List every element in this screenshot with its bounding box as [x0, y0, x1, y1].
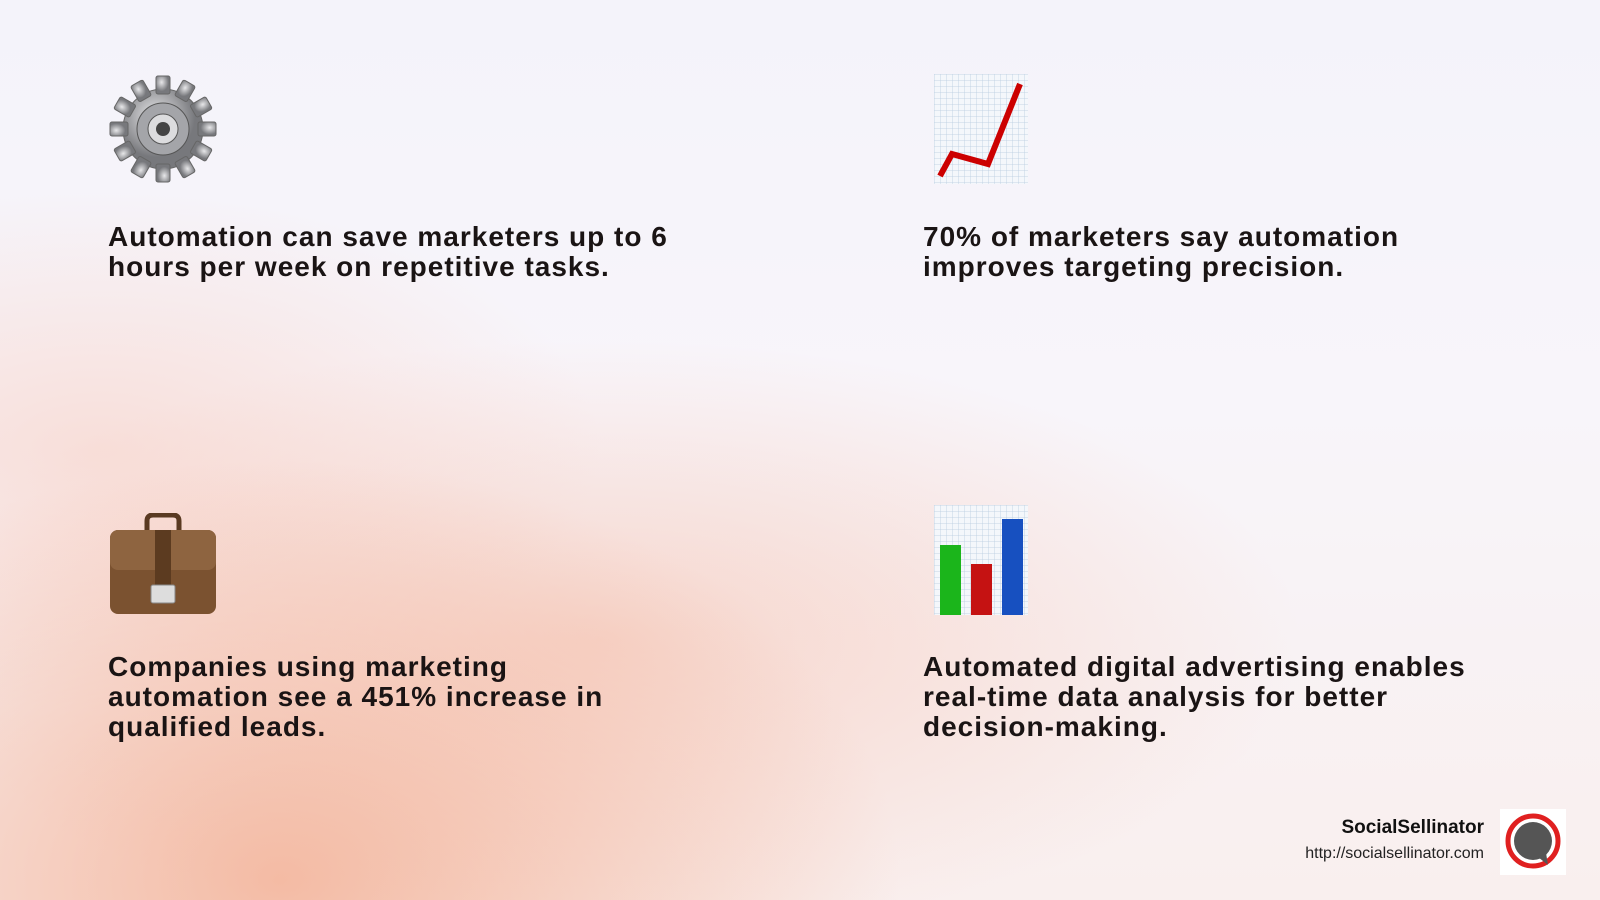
icon: logo — [1500, 809, 1566, 875]
text: stat 1 — [108, 221, 668, 282]
icon: briefcase — [110, 513, 216, 614]
text: stat 3: Companies using marketing — [108, 651, 508, 682]
text: stat 2: 70% of marketers say automation — [923, 221, 1399, 252]
text: stat 3 — [108, 651, 603, 742]
text: stat 1: Automation can save marketers up to 6 — [108, 221, 668, 252]
footer: brand: http://socialsellinator.com — [1305, 845, 1484, 862]
text: stat 4: decision-making. — [923, 711, 1168, 742]
icon: gear — [110, 76, 216, 182]
footer: brand — [1305, 817, 1484, 862]
icon: line chart — [934, 74, 1028, 184]
text: stat 4 — [923, 651, 1466, 742]
footer: brand: SocialSellinator — [1341, 817, 1484, 838]
text: stat 1: hours per week on repetitive tasks. — [108, 251, 610, 282]
icon: bar chart — [934, 505, 1028, 615]
text: stat 2 — [923, 221, 1399, 282]
text: stat 4: Automated digital advertising enables — [923, 651, 1466, 682]
text: stat 3: automation see a 451% increase in — [108, 681, 603, 712]
text: stat 4: real-time data analysis for better — [923, 681, 1388, 712]
text: stat 2: improves targeting precision. — [923, 251, 1344, 282]
text: stat 3: qualified leads. — [108, 711, 326, 742]
